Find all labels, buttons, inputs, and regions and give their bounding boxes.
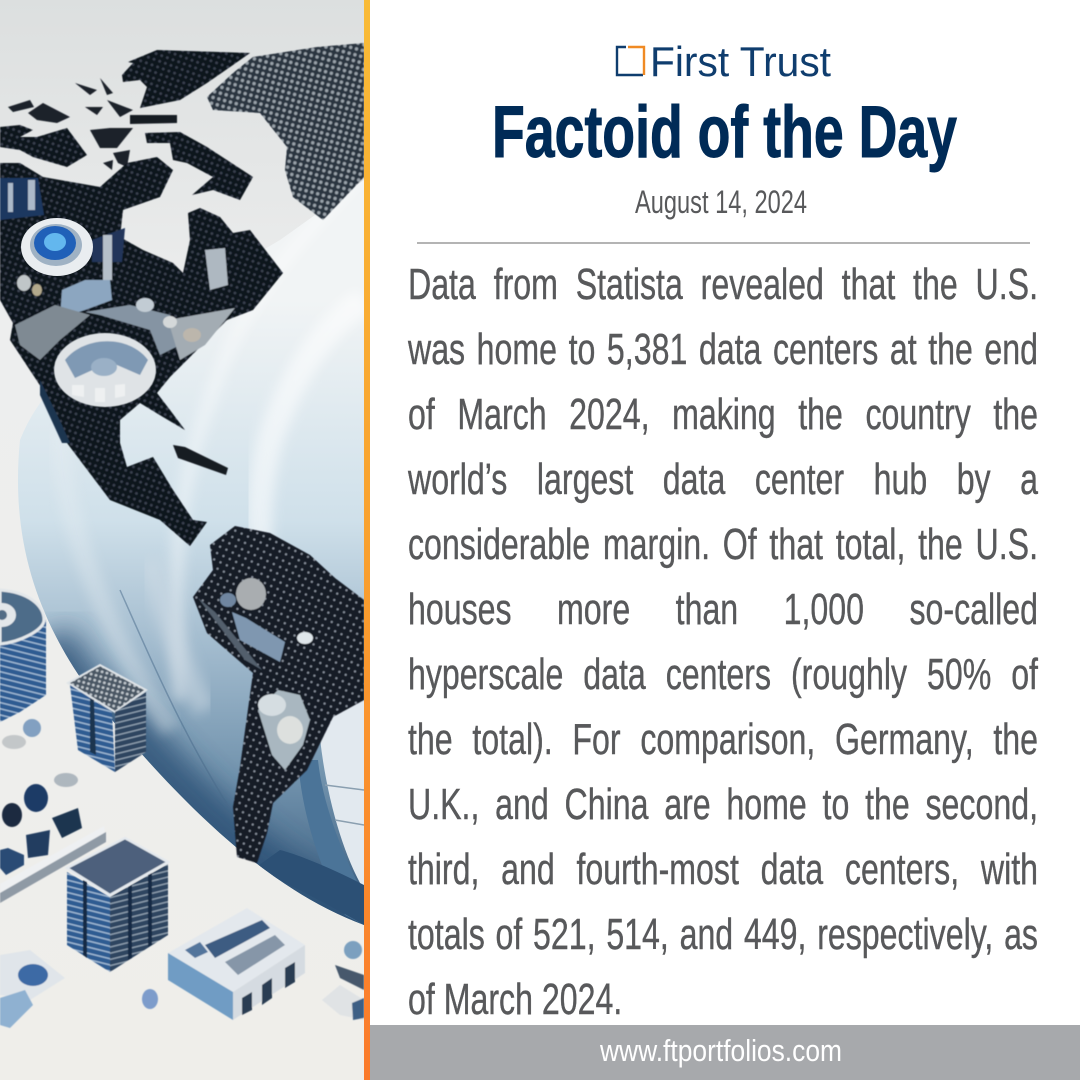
icon: glowing blue node: [21, 218, 93, 276]
body text: hyperscale data centers (roughly 50% of: [408, 650, 1038, 699]
body text: world’s largest data center hub by a: [408, 455, 1038, 504]
body text: totals of 521, 514, and 449, respectively, as: [408, 910, 1038, 959]
map: North America: [0, 50, 283, 546]
server tower: cut-off cylinder: [0, 590, 46, 722]
globe sphere: [0, 170, 364, 940]
icon: crystal dome: [54, 333, 156, 407]
map: South America: [193, 526, 364, 863]
footer bar: [370, 1025, 1080, 1080]
body text: considerable margin. Of that total, the U.S.: [408, 520, 1038, 569]
body text: of March 2024.: [408, 975, 622, 1024]
body text: was home to 5,381 data centers at the end: [408, 325, 1038, 374]
flat server block: [168, 908, 305, 1020]
body text: U.K., and China are home to the second,: [408, 780, 1038, 829]
body text: houses more than 1,000 so-called: [408, 585, 1038, 634]
body text: third, and fourth-most data centers, with: [408, 845, 1038, 894]
body text: the total). For comparison, Germany, the: [408, 715, 1038, 764]
map: Greenland: [207, 43, 364, 220]
tray of hardware components: [0, 719, 106, 903]
divider: [417, 242, 1030, 244]
accent bar: [364, 0, 370, 1080]
server cube: upper: [68, 665, 146, 772]
illustration: world map globe with data centers: [0, 0, 364, 1080]
body text: [408, 260, 1038, 1024]
body text: Data from Statista revealed that the U.S.: [408, 260, 1038, 309]
body text: of March 2024, making the country the: [408, 390, 1038, 439]
logo: First Trust: [616, 40, 831, 84]
server cube: lower: [67, 838, 168, 972]
small device icons bottom: [0, 941, 364, 1028]
icon: logo bracket square: [617, 47, 644, 75]
